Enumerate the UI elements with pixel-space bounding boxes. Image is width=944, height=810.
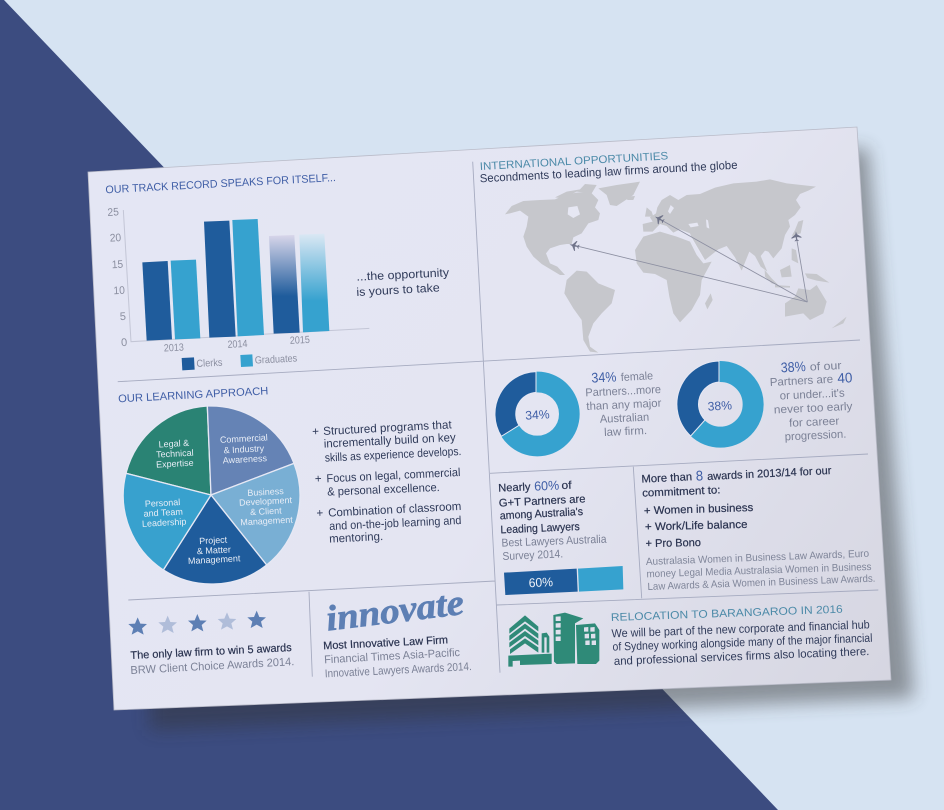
awards text: + Women in business bbox=[644, 502, 754, 517]
bar chart: Clerks bbox=[196, 358, 223, 370]
donut 38% text: or under...it's bbox=[779, 388, 845, 402]
pie chart: Expertise bbox=[156, 458, 194, 470]
pie chart: & Industry bbox=[223, 443, 265, 455]
bar chart: 15 bbox=[112, 259, 123, 271]
heading: international opportunities: INTERNATIONAL OPPORTUNITIES bbox=[479, 150, 669, 173]
learning bullet list: incrementally build on key bbox=[323, 431, 456, 451]
learning bullet list: Structured programs that bbox=[323, 418, 453, 438]
learning bullet list: Focus on legal, commercial bbox=[326, 466, 461, 485]
panel: partner statistics and awards bbox=[495, 358, 876, 595]
learning bullet list: skills as experience develops. bbox=[325, 445, 462, 465]
bar chart: 2014 bbox=[227, 339, 248, 351]
relocation text: of Sydney working alongside many of the major financial bbox=[612, 632, 873, 654]
awards text: + Work/Life balance bbox=[645, 519, 748, 533]
donut 34% text: than any major bbox=[586, 398, 662, 413]
relocation text: We will be part of the new corporate and financial hub bbox=[611, 618, 870, 640]
relocation text bbox=[611, 604, 873, 668]
learning bullet list: & personal excellence. bbox=[327, 481, 440, 499]
leading lawyers text: G+T Partners are bbox=[499, 493, 586, 510]
donut chart 34% bbox=[495, 372, 569, 446]
icon: five stars bbox=[128, 611, 266, 635]
arrows bbox=[574, 218, 807, 302]
pie chart: & Matter bbox=[197, 544, 231, 556]
donut 34% text: female bbox=[621, 370, 653, 384]
award text: BRW: BRW Client Choice Awards 2014. bbox=[130, 656, 295, 677]
pie chart bbox=[123, 406, 300, 584]
panel: learning approach bbox=[118, 385, 462, 584]
learning bullet list bbox=[312, 418, 462, 546]
pie chart: & Client bbox=[250, 505, 282, 517]
donut chart 34%: 34% bbox=[525, 407, 550, 423]
pie chart: Project bbox=[199, 535, 228, 546]
learning bullet list: mentoring. bbox=[329, 530, 383, 546]
panel: relocation bbox=[508, 604, 873, 668]
leading lawyers text: Best Lawyers Australia bbox=[501, 534, 607, 550]
pie chart: Leadership bbox=[142, 517, 187, 529]
leading lawyers text: of bbox=[561, 480, 573, 492]
donut 34% text: 34% bbox=[591, 368, 617, 386]
bar chart: 2013 bbox=[164, 342, 184, 355]
heading: track record: OUR TRACK RECORD SPEAKS FOR ITSELF... bbox=[105, 172, 336, 196]
postcard bbox=[88, 127, 891, 710]
donut 38% text: 40 bbox=[837, 369, 853, 386]
award text: most innovative bbox=[323, 634, 472, 680]
award text: most innovative: Most Innovative Law Firm bbox=[323, 634, 448, 652]
learning bullet list: Combination of classroom bbox=[328, 500, 462, 520]
donut 34% text: law firm. bbox=[604, 425, 647, 439]
donut 38% text: progression. bbox=[784, 429, 847, 443]
donut chart 38%: 38% bbox=[707, 398, 732, 414]
donut 38% text: 38% bbox=[780, 358, 806, 375]
pie chart: Legal & bbox=[158, 438, 189, 449]
pie chart: Development bbox=[239, 495, 293, 508]
heading: international opportunities: Secondments to leading law firms around the globe bbox=[479, 159, 738, 185]
leading lawyers text: 60% bbox=[534, 478, 560, 494]
pie chart: Business bbox=[247, 486, 284, 498]
bar chart: 2015 bbox=[290, 335, 310, 347]
leading lawyers text bbox=[498, 478, 607, 563]
awards text: Australasia Women in Business Law Awards, Euro bbox=[646, 549, 870, 568]
learning bullet list: and on-the-job learning and bbox=[329, 514, 462, 533]
learning bullet list: + bbox=[316, 507, 324, 520]
pie chart: Commercial bbox=[220, 432, 268, 445]
award text: most innovative: Innovative Lawyers Awards 2014. bbox=[325, 661, 472, 680]
bar chart bbox=[107, 206, 369, 370]
bar chart: 5 bbox=[119, 311, 126, 323]
awards text: awards in 2013/14 for our bbox=[707, 465, 832, 483]
leading lawyers text: among Australia's bbox=[500, 506, 584, 522]
awards text: money Legal Media Australasia Women in Business bbox=[646, 562, 872, 580]
donut 34% text bbox=[585, 368, 662, 439]
awards text: More than bbox=[641, 471, 692, 486]
card shadow bbox=[140, 148, 914, 730]
pie chart: and Team bbox=[143, 507, 183, 519]
panel: track record bbox=[105, 172, 450, 370]
chart caption: is yours to take bbox=[356, 281, 440, 299]
donut 34% text: Partners...more bbox=[585, 384, 661, 399]
leading lawyers text: Leading Lawyers bbox=[500, 521, 581, 536]
pie chart: Technical bbox=[156, 448, 194, 460]
leading lawyers text: Nearly bbox=[498, 481, 531, 495]
awards text: Law Awards & Asia Women in Business Law Awards. bbox=[647, 574, 876, 593]
learning bullet list: + bbox=[312, 425, 319, 438]
heading: learning approach: OUR LEARNING APPROACH bbox=[118, 385, 269, 405]
innovate wordmark: innovate bbox=[324, 582, 466, 639]
bar chart: 20 bbox=[110, 232, 121, 245]
donut chart 38% bbox=[677, 361, 753, 437]
bar chart: 10 bbox=[113, 285, 125, 297]
relocation text: RELOCATION TO BARANGAROO IN 2016 bbox=[611, 604, 843, 624]
donut 38% text bbox=[770, 358, 853, 443]
awards text bbox=[641, 465, 876, 593]
donut 38% text: Partners are bbox=[770, 374, 833, 389]
bar chart: Graduates bbox=[255, 353, 297, 367]
donut 34% text: Australian bbox=[600, 412, 649, 426]
awards text: commitment to: bbox=[642, 484, 721, 500]
60% progress bar: 60% bbox=[528, 575, 553, 590]
panel: awards and innovation bbox=[128, 582, 472, 680]
relocation text: and professional services firms also locating there. bbox=[614, 645, 870, 668]
panel: international opportunities bbox=[479, 150, 847, 353]
awards text: 8 bbox=[695, 467, 704, 484]
chart caption bbox=[356, 266, 450, 299]
pie chart: Management bbox=[240, 515, 293, 527]
pie chart: Personal bbox=[145, 497, 180, 509]
award text: BRW bbox=[130, 642, 295, 677]
pie chart: Awareness bbox=[222, 453, 268, 465]
donut 38% text: for career bbox=[789, 416, 840, 430]
award text: most innovative: Financial Times Asia-Pacific bbox=[324, 647, 461, 666]
award text: BRW: The only law firm to win 5 awards bbox=[130, 642, 292, 662]
bar chart: 0 bbox=[121, 337, 128, 349]
chart caption: ...the opportunity bbox=[356, 266, 450, 284]
bar chart: 25 bbox=[107, 206, 119, 219]
icon: buildings bbox=[508, 613, 599, 667]
donut 38% text: never too early bbox=[774, 401, 853, 416]
world map with arrows bbox=[505, 179, 847, 353]
pie chart: Management bbox=[188, 553, 241, 566]
leading lawyers text: Survey 2014. bbox=[502, 548, 563, 563]
donut 38% text: of our bbox=[810, 360, 842, 374]
icon: planes bbox=[568, 212, 802, 252]
learning bullet list: + bbox=[314, 472, 322, 486]
awards text: + Pro Bono bbox=[646, 537, 701, 550]
60% progress bar bbox=[504, 566, 623, 595]
